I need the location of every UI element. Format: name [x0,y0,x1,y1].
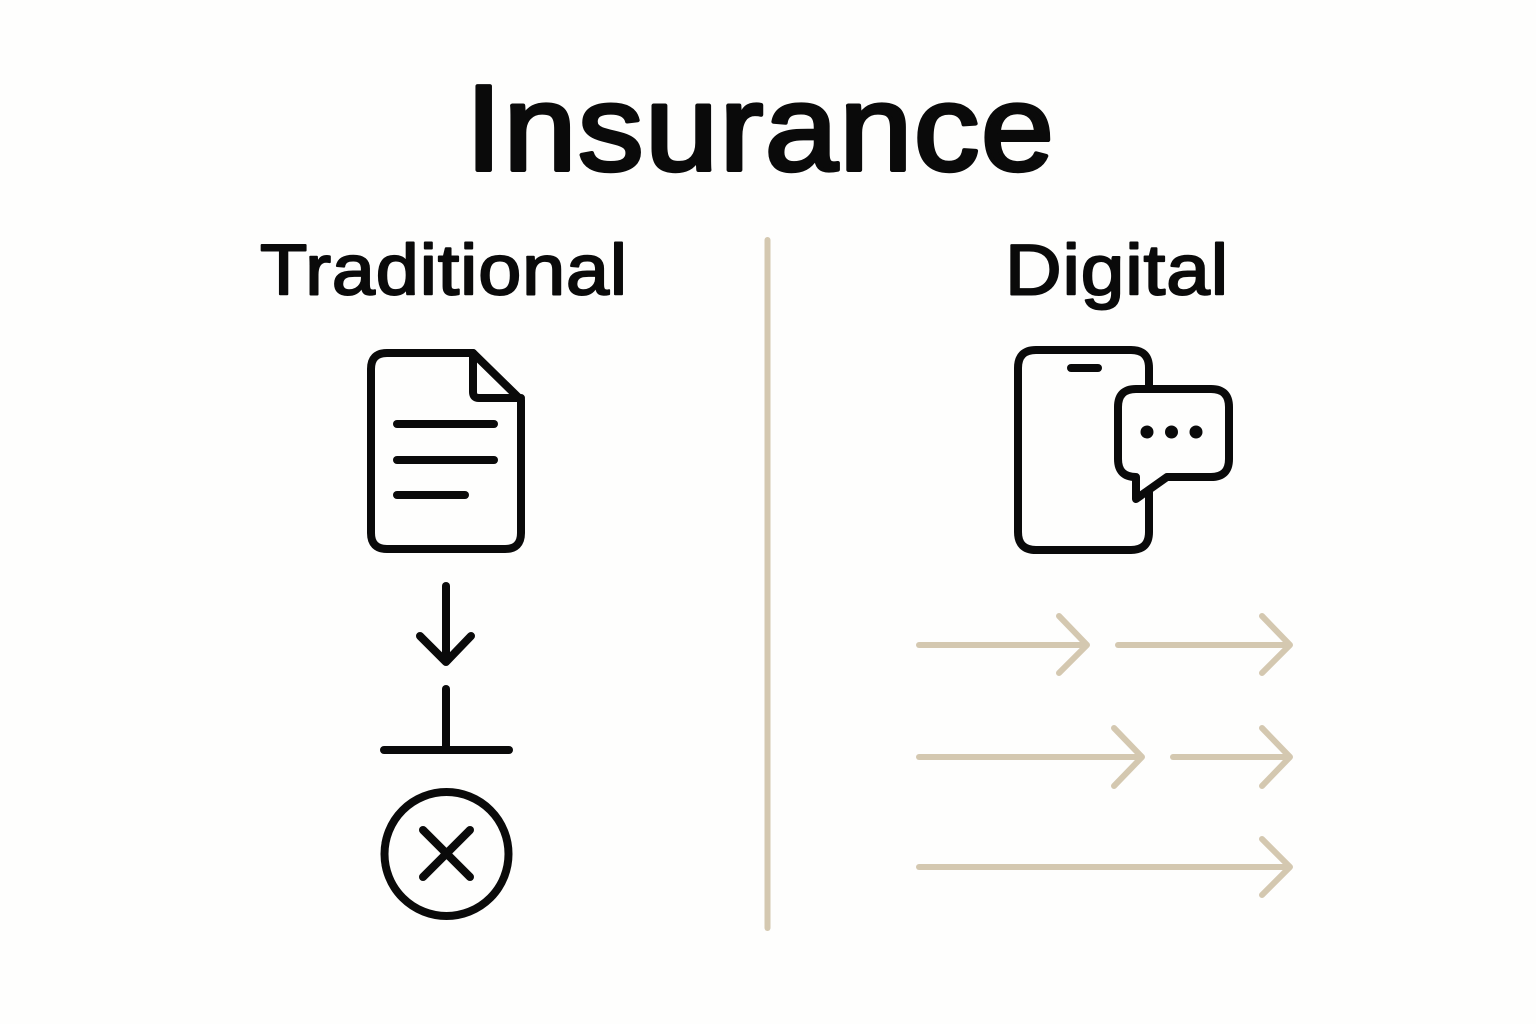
heading: Digital: Digital [1005,232,1229,310]
icon: phone with chat bubble [1018,350,1229,550]
icon: rejected circle [384,792,508,916]
center divider [764,240,770,928]
icon: blocking barrier [384,689,509,750]
title: Insurance [466,60,1056,196]
heading: Traditional: Traditional [260,232,628,310]
icon: document [371,353,521,549]
arrow: down [420,586,471,662]
arrows: fast digital flow [919,616,1290,895]
